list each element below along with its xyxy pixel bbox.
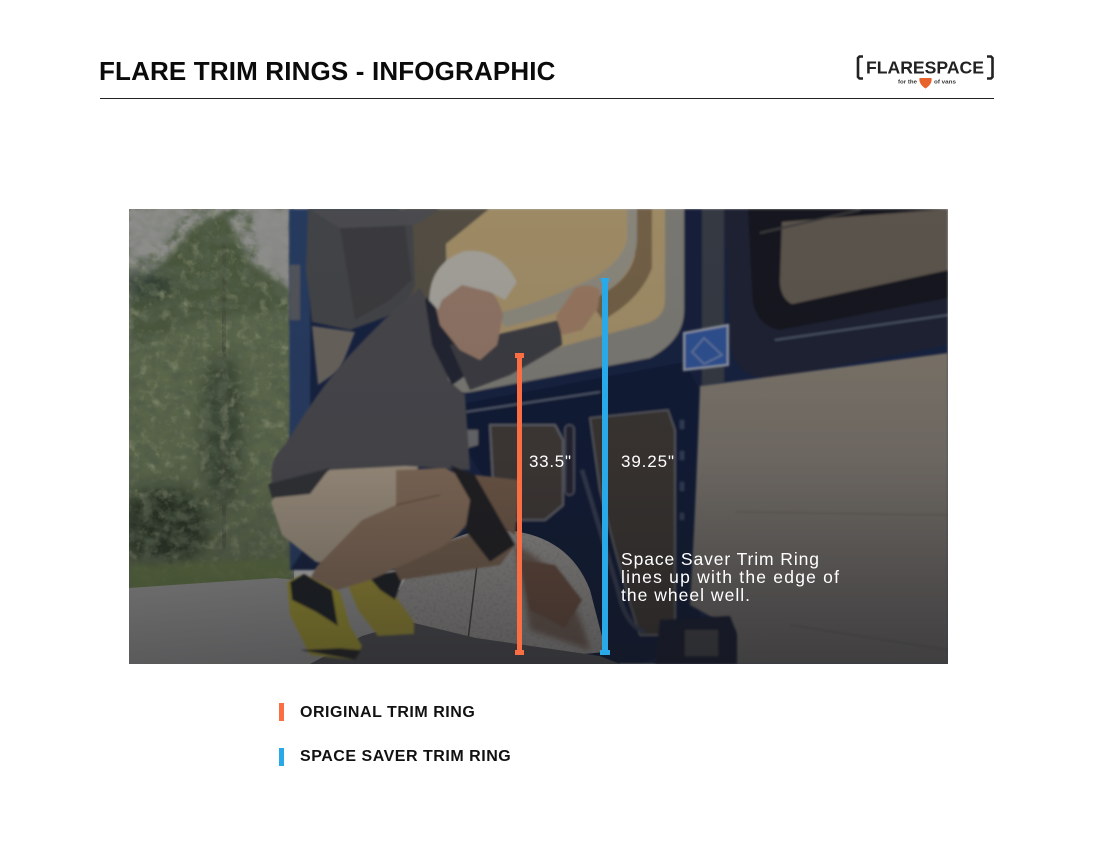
scene: trees and sky <box>115 209 294 592</box>
legend label: space saver: SPACE SAVER TRIM RING <box>300 748 511 765</box>
photo dark overlay <box>129 209 948 664</box>
label: 33.5 inches: 33.5" <box>529 452 571 471</box>
door frame bright trim <box>400 209 684 400</box>
scene: van body <box>289 209 948 664</box>
orange measure line: original trim ring <box>515 353 524 655</box>
logo: Flarespace <box>856 55 994 88</box>
legend item: space saver trim ring <box>279 748 511 766</box>
callout: wheel well note: Space Saver Trim Ring <box>621 549 819 569</box>
hand on ring <box>556 285 600 335</box>
title: FLARE TRIM RINGS - INFOGRAPHIC <box>99 56 556 86</box>
hand on wheel well <box>520 560 582 628</box>
legend <box>279 703 511 766</box>
callout: wheel well note: lines up with the edge of <box>621 567 839 587</box>
header rule <box>100 98 994 99</box>
scene: wheel well insulation <box>400 530 602 654</box>
logo: Flarespace: for the <box>898 80 917 86</box>
body strip and pillar <box>684 209 702 392</box>
back leg <box>390 535 515 580</box>
callout: wheel well note: the wheel well. <box>621 585 750 605</box>
label: 39.25 inches: 39.25" <box>621 452 674 471</box>
swatch: blue <box>279 748 284 766</box>
scene: right lower panel <box>690 353 948 664</box>
lower body ribs <box>466 364 699 590</box>
hair <box>429 251 517 310</box>
front thigh and calf <box>309 468 474 598</box>
lower cutout panels <box>490 425 563 520</box>
plywood panel <box>446 209 665 362</box>
scene: bumper block <box>655 616 737 664</box>
callout: wheel well note <box>621 549 839 605</box>
back foot shoe <box>348 578 415 637</box>
legend item: original trim ring <box>279 703 475 721</box>
scene: crouching man <box>268 251 600 660</box>
swatch: orange <box>279 703 284 721</box>
logo: Flarespace: FLARESPACE <box>866 58 984 78</box>
logo: Flarespace: of vans <box>934 80 956 86</box>
front shoe <box>287 574 362 660</box>
scene: road <box>129 578 620 664</box>
hoodie <box>271 288 470 497</box>
head <box>434 285 503 361</box>
blue measure line: space saver trim ring <box>600 278 610 655</box>
lower sleeve on knee <box>450 465 515 562</box>
shaded inner door <box>406 209 488 299</box>
upper right window frame <box>724 209 948 378</box>
legend label: original: ORIGINAL TRIM RING <box>300 704 475 721</box>
scene: ground shadow <box>310 622 620 664</box>
icon: blue sticker <box>684 325 728 370</box>
photo panel: man fitting trim ring on van <box>129 209 948 664</box>
knee forearm <box>475 475 520 535</box>
sleeve reaching up <box>450 320 562 390</box>
shorts <box>271 463 420 565</box>
scene: person behind <box>306 209 440 385</box>
